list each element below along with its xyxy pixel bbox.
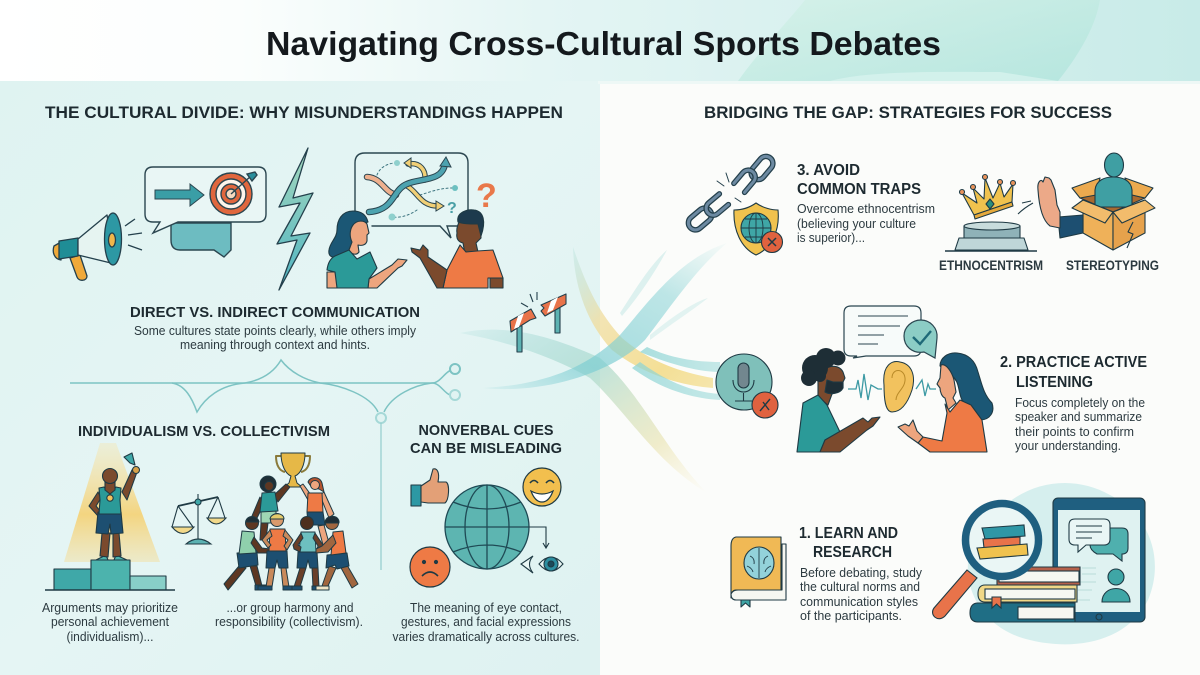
icon: ear and sound waves [848,362,936,412]
icon: eye with arrow [521,527,563,573]
top left figure [252,476,290,540]
text: avoid common traps description: Overcome ethnocentrism [797,202,935,216]
text: direct vs indirect description [134,324,417,352]
subheading: practice active listening [1000,354,1147,391]
subheading: learn and research: RESEARCH [813,544,892,561]
base figure 3 [292,516,328,590]
subheading: avoid common traps [797,162,921,198]
icon: megaphone [53,213,142,280]
heading: cultural divide: THE CULTURAL DIVIDE: WHY MISUNDERSTANDINGS HAPPEN [45,103,563,122]
question marks: ? [476,177,497,215]
subheading: individualism vs collectivism: INDIVIDUALISM VS. COLLECTIVISM [78,423,330,440]
subheading: nonverbal cues: CAN BE MISLEADING [410,440,562,457]
text: avoid common traps description: is superior)... [797,231,865,245]
icon: team pyramid with trophy [224,453,358,590]
text: learn and research description [800,566,923,623]
text: individualism caption: personal achievement [51,615,169,629]
base figure 2 [258,514,296,590]
subheading: nonverbal cues: NONVERBAL CUES [418,422,554,439]
text: active listening description: Focus completely on the [1015,396,1145,410]
strategy 2: practice active listening [716,306,1147,453]
text: nonverbal description: varies dramatically across cultures. [392,630,580,644]
text: learn and research description: Before debating, study [800,566,923,580]
subheading: practice active listening: LISTENING [1016,374,1093,391]
subheading: direct vs indirect: DIRECT VS. INDIRECT COMMUNICATION [130,304,420,321]
icon: balance scale [172,494,226,544]
question marks: ? [447,200,457,217]
question marks [447,177,497,217]
listening man [797,348,880,452]
text: learn and research description: the cultural norms and [800,580,920,594]
top right figure [300,478,334,545]
icon: lightning bolt [277,148,313,290]
text: individualism caption: Arguments may prioritize [42,601,178,615]
panel: nonverbal cues [392,422,580,644]
subheading: learn and research [799,525,898,561]
label: stereotyping: STEREOTYPING [1066,258,1159,273]
text: collectivism caption: responsibility (collectivism). [215,615,363,629]
text: learn and research description: communication styles [800,595,918,609]
text: nonverbal description [392,601,580,644]
strategy 1: learn and research [731,483,1155,644]
panel: bridging the gap [686,103,1159,644]
text: nonverbal description: The meaning of eye contact, [410,601,562,615]
text: individualism caption: (individualism)... [66,630,154,644]
man speaking [411,210,503,288]
text: direct vs indirect description: Some cultures state points clearly, while others imply [134,324,417,338]
subheading: learn and research: 1. LEARN AND [799,525,898,542]
subheading: practice active listening: 2. PRACTICE ACTIVE [1000,354,1147,371]
icon: transcript bubble with check [844,306,937,358]
icon: broken chain [686,154,776,233]
base figure 1 [224,516,270,590]
text: direct vs indirect description: meaning through context and hints. [180,338,370,352]
text: learn and research description: of the participants. [800,609,902,623]
tablet [1053,498,1145,622]
panel: individualism vs collectivism [42,423,363,644]
book stack [970,567,1080,622]
magnifier [933,504,1038,619]
icon: broken barrier [510,292,566,352]
speech bubble: indirect with tangled arrows [355,153,468,238]
subheading: nonverbal cues [410,422,562,457]
heading: bridging the gap: BRIDGING THE GAP: STRATEGIES FOR SUCCESS [704,103,1112,122]
text: active listening description: your understanding. [1015,439,1121,453]
text: avoid common traps description [797,202,935,245]
text: individualism caption [42,601,178,644]
text: active listening description: speaker and summarize [1015,410,1142,424]
speech bubble: direct [145,167,266,257]
icon: globe [445,485,529,569]
icon: muted microphone [716,354,778,418]
text: active listening description: their points to confirm [1015,425,1134,439]
text: collectivism caption [215,601,363,629]
text: active listening description [1015,396,1145,453]
subheading: avoid common traps: 3. AVOID [797,162,860,179]
base figure 4 [316,516,358,590]
icon: happy face [523,468,561,506]
woman speaking [327,211,407,288]
subheading: avoid common traps: COMMON TRAPS [797,181,921,198]
icon: thumbs up [411,469,449,506]
listening woman [898,353,993,452]
icon: book with brain [731,537,786,607]
swoosh ribbons connecting both panels [460,243,727,493]
strategy 3: avoid common traps [686,153,1159,273]
icon: crown on pedestal [945,174,1037,251]
icon: shield with globe [734,203,782,255]
icon: sad face [410,547,450,587]
text: collectivism caption: ...or group harmony and [226,601,354,615]
icon: hand stopping box [1038,153,1155,250]
trophy [276,453,310,487]
text: nonverbal description: gestures, and facial expressions [401,615,571,629]
label: ethnocentrism: ETHNOCENTRISM [939,258,1043,273]
text: avoid common traps description: (believing your culture [797,217,916,231]
icon: athlete on podium [45,443,175,590]
panel: the cultural divide [45,103,566,352]
icon: research blob with tablet, books and magnifier [933,483,1155,644]
connector lines [70,360,460,570]
title: Navigating Cross-Cultural Sports Debates [266,25,941,62]
